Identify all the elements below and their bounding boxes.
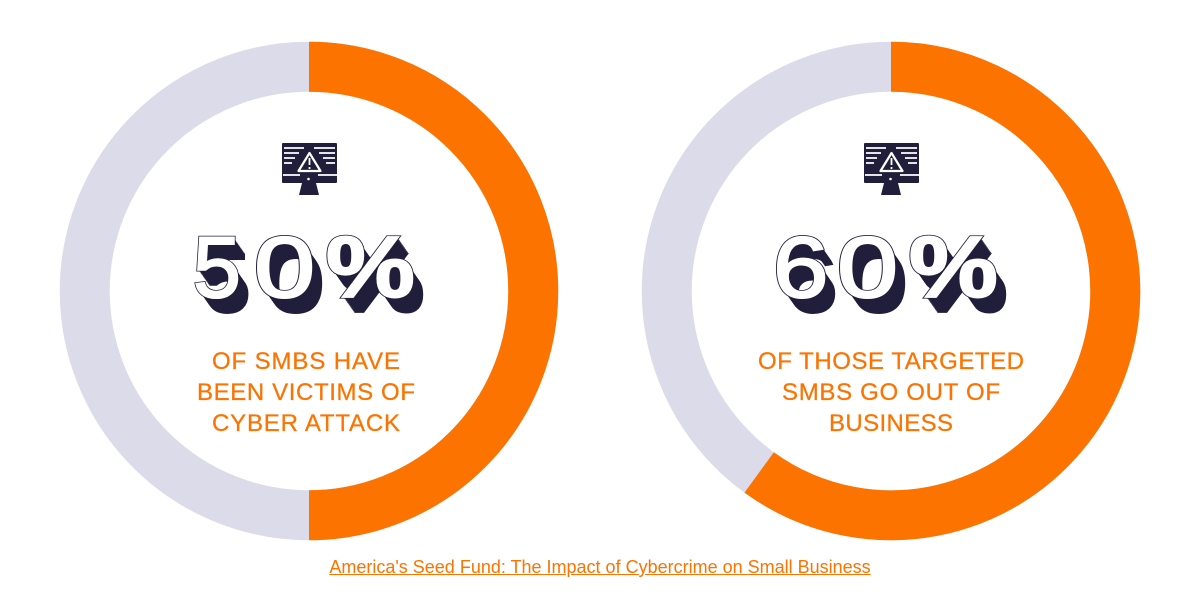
big number: 50%: 0 [254,220,315,316]
big number: 60% [773,220,1006,316]
caption: right: SMBS GO OUT OF [782,379,1000,406]
big number: 50%: 5 [193,220,241,316]
big number: 60%: % [909,220,998,316]
icon: monitor alert [282,143,337,195]
caption: left [197,348,415,437]
big number: 50%: 0 [254,220,315,316]
big number: 50%: % [326,220,415,316]
caption: left: CYBER ATTACK [212,410,400,437]
caption: right [758,348,1024,437]
panel: right stat 60% [667,67,1115,515]
icon: monitor alert [864,143,919,195]
big number: 60%: 0 [837,220,898,316]
big number: 50% [193,220,424,316]
source link: America's Seed Fund: The Impact of Cybercrime on Small Business [329,557,871,577]
big number: 60%: 0 [837,220,898,316]
donut chart: 50% [85,67,533,515]
big number: 50%: 5 [193,220,241,316]
caption: right: BUSINESS [829,410,953,437]
panel: left stat 50% [85,67,533,515]
caption: left: OF SMBS HAVE [212,348,400,375]
caption: left: BEEN VICTIMS OF [197,379,415,406]
donut chart: 60% [667,67,1115,515]
caption: right: OF THOSE TARGETED [758,348,1024,375]
big number: 60%: % [909,220,998,316]
big number: 60%: 6 [773,220,828,316]
big number: 50%: % [326,220,415,316]
big number: 60%: 6 [773,220,828,316]
